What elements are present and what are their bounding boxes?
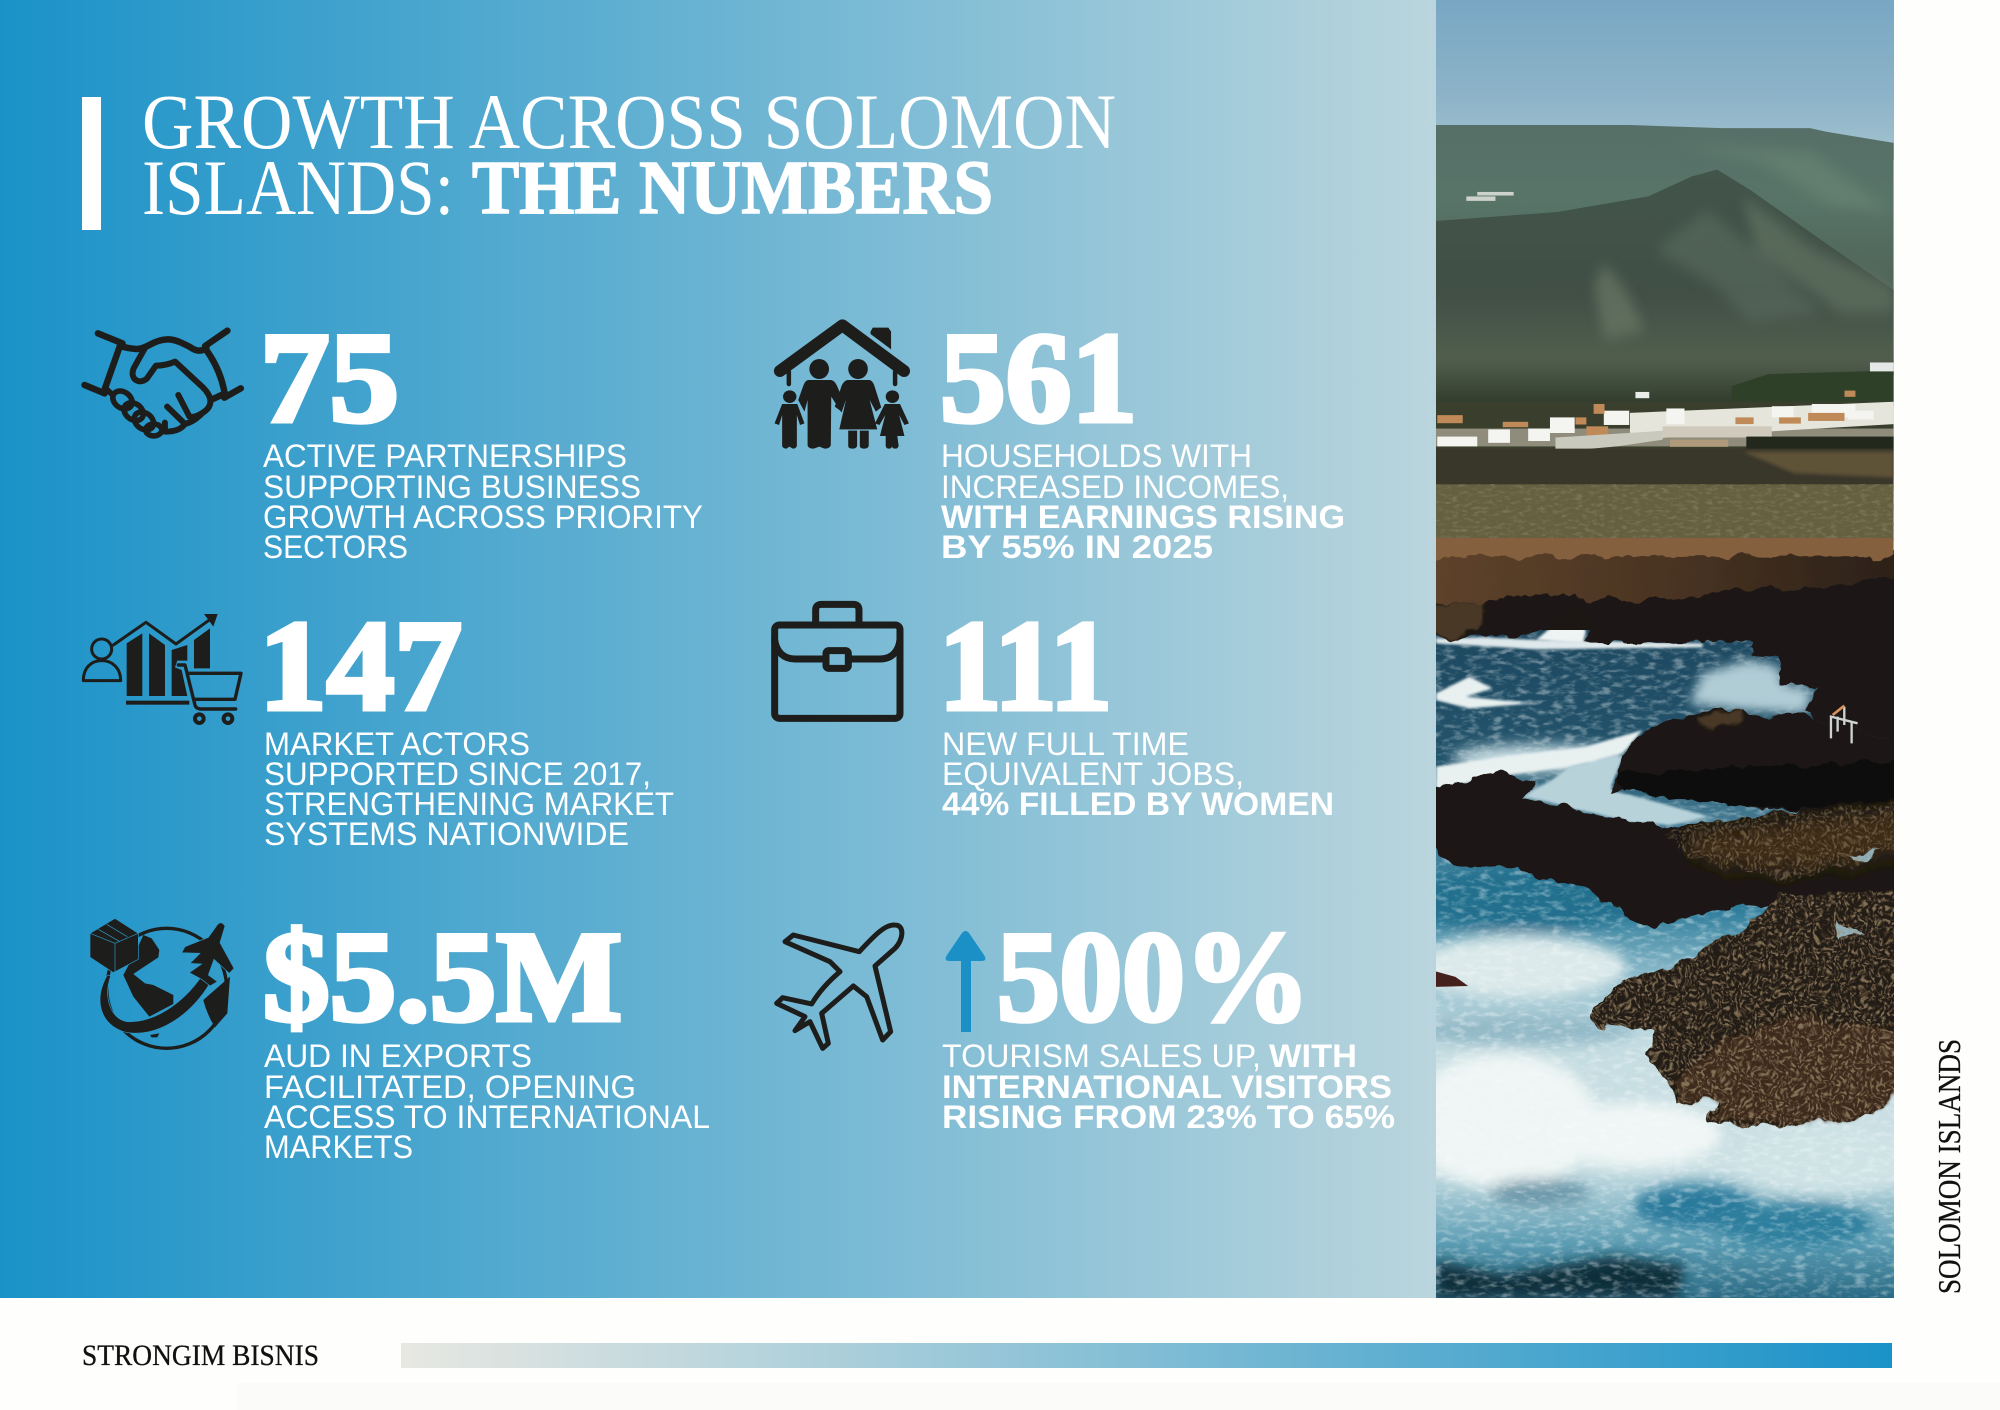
description: tourism	[942, 1038, 1395, 1135]
icon: handshake	[85, 331, 241, 436]
stat: 111 jobs	[775, 594, 1334, 822]
number: 75: 75	[260, 306, 399, 449]
description: tourism: RISING FROM 23% TO 65%	[942, 1099, 1395, 1135]
panel: gradient background	[0, 0, 1436, 1298]
description: active partnerships: GROWTH ACROSS PRIORITY	[263, 499, 703, 535]
railing on rock	[1831, 706, 1858, 743]
description: market actors: MARKET ACTORS	[264, 726, 530, 762]
icon: market chart with person and cart	[83, 614, 241, 723]
description: households: BY 55% IN 2025	[941, 529, 1213, 565]
description: market actors: SYSTEMS NATIONWIDE	[264, 816, 629, 852]
sea	[1436, 630, 1894, 1298]
description: households: INCREASED INCOMES,	[941, 469, 1289, 505]
description: exports	[264, 1038, 710, 1165]
footer label: STRONGIM BISNIS	[82, 1339, 319, 1372]
vertical label: SOLOMON ISLANDS	[1931, 1039, 1967, 1294]
plains	[1436, 449, 1894, 489]
town	[1436, 391, 1894, 452]
description: households: HOUSEHOLDS WITH	[941, 438, 1252, 474]
description: market actors: STRENGTHENING MARKET	[264, 786, 674, 822]
description: active partnerships: SECTORS	[263, 529, 408, 565]
title: THE NUMBERS	[472, 146, 993, 230]
description: active partnerships: SUPPORTING BUSINESS	[263, 469, 641, 505]
description: exports: AUD IN EXPORTS	[264, 1038, 532, 1074]
description: active partnerships	[263, 438, 703, 565]
footer gradient bar	[401, 1343, 1892, 1368]
icon: briefcase	[775, 604, 900, 718]
description: market actors	[264, 726, 674, 852]
title: GROWTH ACROSS SOLOMON	[142, 78, 1116, 165]
description: tourism: INTERNATIONAL VISITORS	[942, 1069, 1392, 1105]
description: exports: MARKETS	[264, 1129, 413, 1165]
number: $5.5M: $5.5M	[263, 905, 622, 1048]
description: tourism: TOURISM SALES UP,	[942, 1038, 1261, 1074]
icon: up arrow	[946, 931, 985, 1032]
icon: globe with parcel and plane	[90, 918, 234, 1048]
stat: $5.5M exports	[90, 905, 710, 1165]
rocks	[1423, 557, 1909, 1128]
title: ISLANDS:	[142, 144, 454, 231]
icon: airplane	[777, 925, 902, 1048]
description: jobs	[942, 726, 1334, 822]
description: active partnerships: ACTIVE PARTNERSHIPS	[263, 438, 627, 474]
number: 111: 111	[939, 594, 1112, 737]
photo: coastal landscape	[1436, 0, 1894, 1298]
icon: family under house roof	[775, 325, 909, 449]
description: households	[941, 438, 1345, 565]
title accent bar	[82, 97, 101, 230]
description: exports: FACILITATED, OPENING	[264, 1069, 636, 1105]
number: 500%: 500%	[997, 905, 1310, 1048]
stat: 75 active partnerships	[85, 306, 703, 565]
stat: 561 households	[775, 306, 1345, 565]
stat: 147 market actors	[83, 594, 674, 852]
description: households: WITH EARNINGS RISING	[941, 499, 1345, 535]
number: 561: 561	[940, 306, 1137, 449]
description: exports: ACCESS TO INTERNATIONAL	[264, 1099, 710, 1135]
description: market actors: SUPPORTED SINCE 2017,	[264, 756, 651, 792]
description: jobs: NEW FULL TIME	[942, 726, 1189, 762]
title	[142, 78, 1116, 231]
description: tourism: WITH	[1269, 1038, 1357, 1074]
description: jobs: EQUIVALENT JOBS,	[942, 756, 1244, 792]
stat: 500% tourism	[777, 905, 1395, 1135]
number: 147: 147	[259, 594, 462, 737]
faint bottom band	[237, 1383, 2000, 1410]
description: jobs: 44% FILLED BY WOMEN	[942, 786, 1334, 822]
